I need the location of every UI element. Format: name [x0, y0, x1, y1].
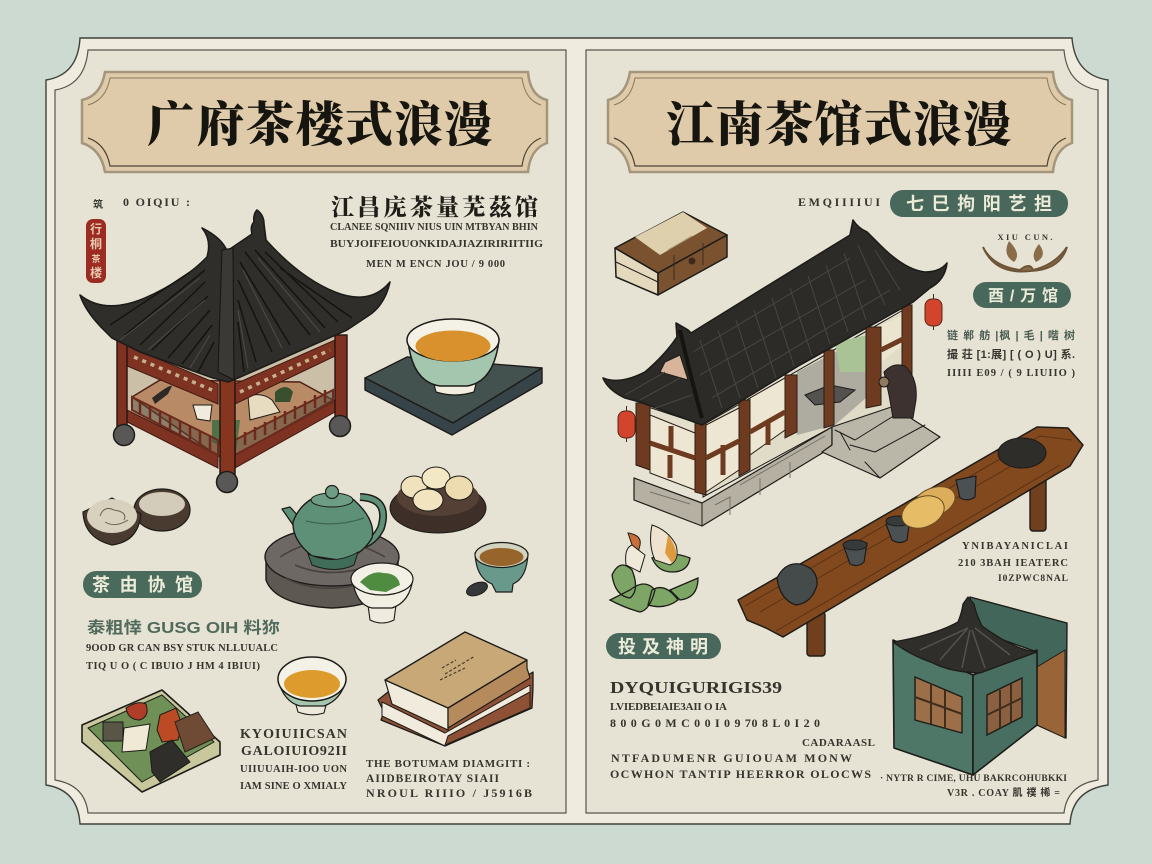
pavilion back rail and floor	[127, 332, 335, 468]
text block: bottom right: · NYTR R CIME, UHU BAKRCOHUBKKI	[880, 774, 1067, 784]
walls and windows	[636, 305, 912, 497]
roof	[603, 220, 947, 425]
small header label: 筑	[93, 198, 103, 211]
text block: left middle: TIQ U O ( C IBUIO J HM 4 IBIUI)	[86, 661, 260, 672]
top text block: left: BUYJOIFEIOUONKIDAJIAZIRIRIITIIG	[330, 239, 543, 250]
stone base and steps	[634, 395, 940, 526]
icon: green teapot on stand	[265, 486, 399, 608]
text block: right lower left: 8 0 0 G 0 M C 0 0 I 0 9 70 8 L 0 I 2 0	[610, 716, 820, 730]
text block: right upper: IIIII E09 / ( 9 LIUIIO )	[947, 368, 1076, 379]
icon: white bowl with greens	[351, 563, 413, 623]
icon: bento tray	[82, 690, 220, 792]
text block: right lower left: NTFADUMENR GUIOUAM MONW	[611, 751, 852, 765]
pavilion pillars and stone feet	[114, 335, 350, 492]
red seal: 桐	[90, 237, 102, 251]
text block: lower right: AIIDBEIROTAY SIAII	[366, 773, 500, 785]
text block: lower right	[366, 758, 532, 800]
bread on table	[897, 481, 960, 534]
tea cups on table	[777, 438, 1046, 605]
pill label: right second	[973, 282, 1071, 308]
lanterns	[618, 294, 942, 442]
icon: tea cup on dark tray	[365, 319, 542, 435]
text block: right lower left: LVIEDBEIAIE3AII O IA	[610, 701, 727, 713]
small header label: 0 OIQIU :	[123, 195, 190, 209]
text block: center lower left: IAM SINE O XMIALY	[240, 781, 347, 792]
illustration: Jiangnan teahouse	[603, 220, 947, 526]
title plaque: left: 广府茶楼式浪漫	[147, 86, 492, 155]
text block: right upper	[947, 328, 1076, 379]
text block: bottom right	[880, 774, 1067, 799]
text block: right lower left: CADARAASL	[802, 737, 875, 749]
icon: long wooden tea table	[738, 427, 1083, 656]
icon: second tea cup	[278, 657, 346, 715]
pill label: left: 茶由协馆	[92, 574, 193, 595]
text block: left middle: 9OOD GR CAN BSY STUK NLLUUALC	[86, 643, 278, 654]
red seal: 行	[90, 221, 102, 236]
table top	[738, 427, 1083, 637]
text block: right of table: YNIBAYANICLAI	[962, 541, 1068, 552]
pavilion roof	[80, 210, 390, 382]
red seal: 茶	[91, 253, 101, 264]
pill label: right top: 七巳拘阳艺担	[906, 193, 1052, 214]
text block: center lower left: UIIUUAIH-IOO UON	[240, 764, 347, 775]
text block: center lower left	[240, 727, 347, 792]
text block: lower right: THE BOTUMAM DIAMGITI :	[366, 758, 530, 770]
title plaque: right	[608, 72, 1072, 172]
small header label	[93, 195, 190, 211]
red seal: 楼	[90, 265, 102, 280]
icon: leaf emblem: XIU CUN.	[998, 232, 1052, 242]
text block: right upper: 链 郸 舫 |枫 | 毛 | 喈 树	[947, 328, 1075, 342]
title plaque: left	[82, 72, 547, 172]
icon: leaf emblem	[983, 232, 1067, 272]
table legs	[807, 478, 1046, 656]
icon: flowers and leaves	[610, 525, 698, 612]
illustration: pavilion	[80, 210, 390, 492]
pill label: right top	[890, 190, 1068, 217]
text block: right upper: 撮 荘 [1:展] [ ( O ) U] 系.	[947, 347, 1075, 361]
text block: left middle	[86, 618, 280, 672]
top text block: left: 江昌庑茶量芜茲馆	[331, 189, 538, 222]
icon: wooden box	[615, 212, 727, 295]
text block: right of table: I0ZPWC8NAL	[998, 574, 1068, 584]
small header label: right: EMQIIIIUI	[798, 195, 880, 209]
title plaque: right: 江南茶馆式浪漫	[666, 86, 1011, 155]
text block: right lower left: DYQUIGURIGIS39	[610, 678, 782, 697]
text block: center lower left: KYOIUIICSAN	[240, 727, 347, 742]
text block: right lower left: OCWHON TANTIP HEERROR OLOCWS	[610, 767, 871, 781]
pill label: right lower: 投及神明	[618, 637, 708, 657]
pill label: left	[83, 571, 202, 598]
top text block: left: MEN M ENCN JOU / 9 000	[366, 259, 505, 270]
text block: center lower left: GALOIUIO92II	[241, 744, 347, 759]
icon: small green cup with spoon	[465, 542, 528, 599]
top text block: left: CLANEE SQNIIIV NIUS UIN MTBYAN BHIN	[330, 222, 539, 233]
text block: lower right: NROUL RIIIO / J5916B	[366, 786, 532, 800]
text block: right lower left	[610, 678, 875, 781]
pill label: right second: 酉/万馆	[988, 286, 1058, 305]
icon: steamer containers	[83, 489, 190, 545]
panel: Jiangnan teahouse	[603, 72, 1083, 799]
icon: stacked books	[378, 632, 533, 746]
text block: left middle: 泰粗悻 GUSG OIH 料狝	[87, 618, 280, 637]
icon: dim sum plate	[390, 467, 486, 533]
figure at doorway	[879, 365, 916, 418]
text block: bottom right: V3R . COAY 肌 襆 桸 =	[947, 786, 1060, 799]
red seal	[86, 219, 106, 283]
icon: green kiosk	[893, 597, 1067, 775]
panel: Cantonese teahouse	[80, 72, 547, 800]
text block: right of table	[958, 541, 1068, 584]
top text block: left	[330, 189, 543, 270]
text block: right of table: 210 3BAH IEATERC	[958, 558, 1068, 569]
pill label: right lower	[606, 633, 721, 659]
